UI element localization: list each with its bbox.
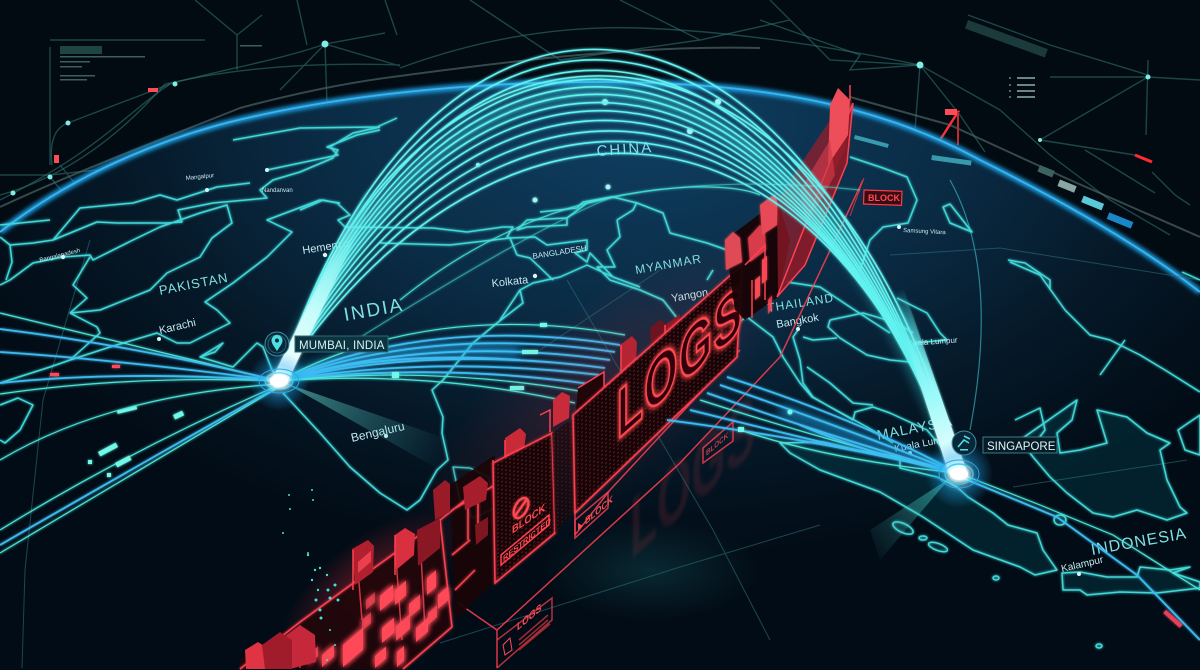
teal glow on floor below wall	[540, 520, 760, 620]
map: country borders and coastlines	[0, 118, 1200, 648]
Pakistan and western borders	[0, 200, 340, 383]
place labels: Bangkok	[775, 312, 820, 331]
glow beneath data arcs	[279, 93, 958, 473]
node: Mumbai	[249, 351, 309, 411]
panel: restricted block sign: BLOCK	[512, 502, 545, 537]
place labels: Samsung Vitara	[903, 228, 946, 236]
India coast	[283, 290, 523, 510]
red firewall structure	[240, 85, 902, 670]
panel: upper translucent red wall	[777, 85, 853, 297]
place labels: Kuala Lumpur	[893, 432, 957, 455]
glow beneath Singapore fan	[780, 410, 958, 473]
globe grid lines	[22, 180, 1200, 668]
Sumatra, Java, Borneo	[780, 442, 1057, 575]
place labels: Nandanvan	[262, 188, 293, 194]
fan lines left of Mumbai	[0, 313, 279, 553]
icon: Singapore route marker	[952, 431, 976, 455]
background HUD network lines	[0, 0, 1200, 237]
place labels: CHINA	[596, 139, 654, 160]
place labels: THAILAND	[766, 291, 835, 315]
place labels: Bengaluru	[350, 419, 406, 445]
small labels on wall base: BLOCK	[585, 493, 613, 528]
small labels on wall base: LOGS	[517, 602, 541, 634]
place labels: MALAYSIA	[876, 413, 954, 443]
label: Singapore	[983, 437, 1057, 453]
Nepal, Bangladesh, China borders	[510, 197, 727, 318]
place labels	[39, 139, 1188, 576]
red reflection of wall on floor: LOGS	[630, 375, 755, 579]
arc nodes and lower arcs	[340, 99, 860, 350]
label: Mumbai, India: MUMBAI, INDIA	[299, 340, 385, 352]
label: Singapore: SINGAPORE	[987, 441, 1056, 453]
data arcs: Mumbai to Singapore	[279, 49, 958, 473]
place labels: Bangalapadesh	[39, 248, 81, 264]
island cluster near globe limb	[854, 135, 972, 166]
small labels on wall base	[497, 422, 733, 668]
floor outlines	[458, 180, 863, 668]
particles: teal data dots	[282, 489, 340, 661]
small labels on wall base: BLOCK	[706, 430, 728, 458]
icon: prohibition sign	[511, 495, 531, 521]
bright beams at arc ends	[271, 188, 967, 474]
place labels: Yangon	[670, 287, 709, 305]
place labels: BANGLADESH	[532, 243, 588, 261]
blocks behind logs panel	[540, 314, 680, 432]
place labels: MYANMAR	[634, 251, 703, 277]
place labels: Kolkata	[491, 274, 530, 290]
label: Mumbai, India	[295, 336, 388, 352]
node: Singapore	[925, 440, 993, 508]
wall segment: blocks between panels	[433, 428, 526, 620]
lines east of Singapore	[958, 473, 1200, 640]
fan lines from wall to Singapore	[667, 377, 958, 473]
panel: LOGS: LOGS	[617, 268, 743, 455]
place labels: Hemenzo	[302, 238, 350, 257]
place labels: Kalampur	[1060, 554, 1105, 575]
panel: restricted block sign: RESTRICTED	[503, 515, 551, 564]
wall segment: dotted gap	[552, 418, 574, 533]
place labels: Kuala Lumpur	[908, 336, 958, 348]
glow beneath Mumbai fan	[279, 349, 520, 381]
place labels: INDONESIA	[1090, 525, 1188, 559]
sign: BLOCK: BLOCK	[868, 193, 900, 203]
wall segment: upper block cluster	[725, 194, 790, 320]
place labels: INDIA	[342, 295, 406, 326]
icon: Mumbai map pin	[265, 332, 289, 356]
place labels: Karachi	[158, 317, 197, 337]
sign: BLOCK	[850, 178, 902, 216]
panel: LOGS	[573, 265, 743, 513]
wall segment: lower-left block cluster	[240, 518, 452, 669]
panel: restricted block sign	[493, 433, 555, 583]
fan lines from Mumbai to wall	[279, 323, 625, 403]
place labels: Mangalpur	[186, 173, 214, 182]
Thailand, Malaysia, Vietnam	[700, 282, 950, 457]
3D box blocks	[245, 518, 440, 669]
place labels: PAKISTAN	[158, 270, 230, 298]
